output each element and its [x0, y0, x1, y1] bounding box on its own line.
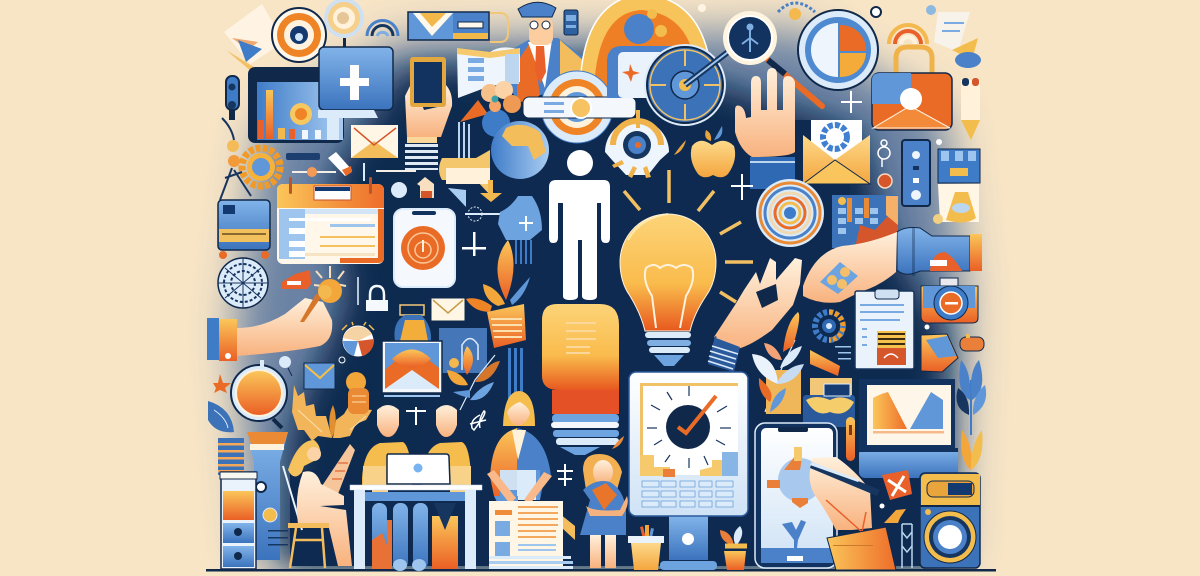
icon: washing machine camera: [920, 473, 980, 568]
icon: blue robot panel: [607, 9, 672, 98]
icon: picture panel: [382, 341, 442, 397]
icon: hand holding card: [803, 232, 897, 303]
icon: target badge: [272, 8, 326, 62]
icon: orange lamp body: [542, 304, 619, 455]
icon: small leaf: [612, 436, 624, 449]
icon: flower cluster with blue ball: [458, 81, 521, 158]
icon: leaf plant lower: [447, 346, 500, 410]
icon: small rainbow: [889, 25, 927, 44]
icon: table and blue canisters: [350, 485, 482, 571]
person: white standing figure: [549, 150, 610, 300]
icon: light bulb: [620, 214, 716, 366]
icon: small potted plant: [720, 526, 747, 570]
icon: megaphone: [439, 150, 502, 207]
icon: monitor with bar chart: [248, 67, 344, 160]
icon: orange gear: [242, 148, 280, 186]
icon: blue monitor with plus: [318, 47, 393, 140]
person: child holding book: [580, 454, 628, 568]
icon: rainbow arcs: [367, 20, 398, 36]
icon: tablet with orange spiral: [394, 209, 455, 287]
icon: blue battery panel: [902, 139, 942, 206]
icon: open envelope white: [351, 125, 398, 158]
icon: thermometer pill: [846, 417, 855, 461]
icon: folded card and bowl: [803, 346, 855, 427]
icon: jar and small envelope: [394, 298, 465, 341]
icon: clipboard: [855, 289, 914, 369]
icon: blue sprig: [956, 360, 986, 470]
icon: half gear emblem: [605, 110, 669, 178]
icon: small ornament top right: [698, 3, 936, 20]
icon: jar top: [564, 10, 578, 35]
icon: key and red dot: [878, 140, 892, 188]
icon: running figure: [220, 118, 251, 200]
icon: papers stack: [489, 501, 575, 569]
icon: camera lens: [921, 278, 978, 330]
icon: envelope bar card: [408, 12, 508, 42]
icon: hand holding phone: [405, 57, 452, 170]
icon: small blue envelope: [304, 357, 345, 389]
icon: blue tower: [247, 432, 288, 560]
icon: folder corner orange: [827, 527, 896, 570]
icon: clock monitor on stand: [629, 372, 748, 570]
icon: paper fan top left: [224, 4, 284, 72]
icon: plant in pot: [466, 240, 530, 406]
icon: sparkle plus: [731, 91, 862, 200]
icon: globe: [491, 121, 549, 179]
icon: blue small gear: [815, 312, 843, 340]
icon: flashlight: [897, 228, 982, 276]
icon: phone with hand and pen: [755, 423, 880, 568]
icon: pie circle: [798, 10, 878, 90]
icon: padlock: [357, 277, 388, 311]
icon: golden wreath: [292, 372, 372, 441]
icon: gauge dial: [644, 44, 728, 126]
person: standing woman: [487, 391, 552, 504]
icon: leaf sprig: [752, 312, 804, 414]
icon: ring target with slider bar: [523, 71, 636, 143]
icon: laptop chart: [859, 379, 958, 478]
icon: laptop on desk: [387, 454, 450, 484]
icon: target swirl: [756, 179, 824, 247]
icon: squiggle mark: [470, 411, 486, 430]
icon: orange ring magnifier: [231, 360, 287, 428]
icon: orange blue briefcase: [872, 47, 952, 130]
icon: blue card behind plant: [439, 328, 487, 373]
icon: filing cabinet: [220, 472, 257, 569]
icon: keypad and flask: [933, 149, 980, 224]
icon: slider line with chip: [292, 152, 416, 181]
person: seated woman with scroll: [283, 440, 355, 568]
icon: card and small tag: [921, 334, 984, 372]
icon: cup with pens: [628, 525, 664, 570]
icon: red x card and star: [880, 470, 912, 568]
icon: magnifier: [723, 11, 822, 106]
icon: small dot on stem: [279, 356, 292, 376]
icon: small pie on stem: [342, 322, 374, 357]
icon: note with check cloud: [934, 12, 981, 68]
icon: man in suit and cap: [507, 2, 587, 104]
icon: plus small: [557, 464, 573, 486]
icon: dot and small house: [391, 177, 434, 198]
icon: traffic light: [226, 76, 239, 120]
icon: blue leaf badge: [208, 401, 234, 432]
icon: calendar with form: [277, 177, 384, 264]
icon: credit card device on wheels: [218, 200, 270, 259]
icon: hand with brush: [207, 285, 332, 361]
icon: bulb rays: [624, 170, 753, 302]
icon: raised hand: [735, 68, 795, 189]
icon: large orange arcs: [580, 0, 712, 90]
icon: apple: [674, 126, 735, 177]
icon: concentric rings with stem: [324, 0, 364, 48]
icon: hand pinching: [708, 258, 802, 372]
icon: blue blaster with stripes: [465, 196, 542, 264]
icon: wire globe: [218, 258, 268, 308]
icon: small shape and sun: [282, 266, 346, 303]
icon: stacked cups: [218, 438, 244, 475]
person: two men behind laptop: [362, 405, 471, 498]
icon: envelope with gear letter: [803, 120, 870, 184]
icon: pencil: [961, 78, 980, 140]
icon: star: [213, 374, 231, 393]
icon: keypad picture panel: [832, 195, 898, 248]
icon: open book: [457, 47, 520, 98]
icon: plus: [462, 232, 486, 256]
baseline rule: [206, 569, 996, 572]
